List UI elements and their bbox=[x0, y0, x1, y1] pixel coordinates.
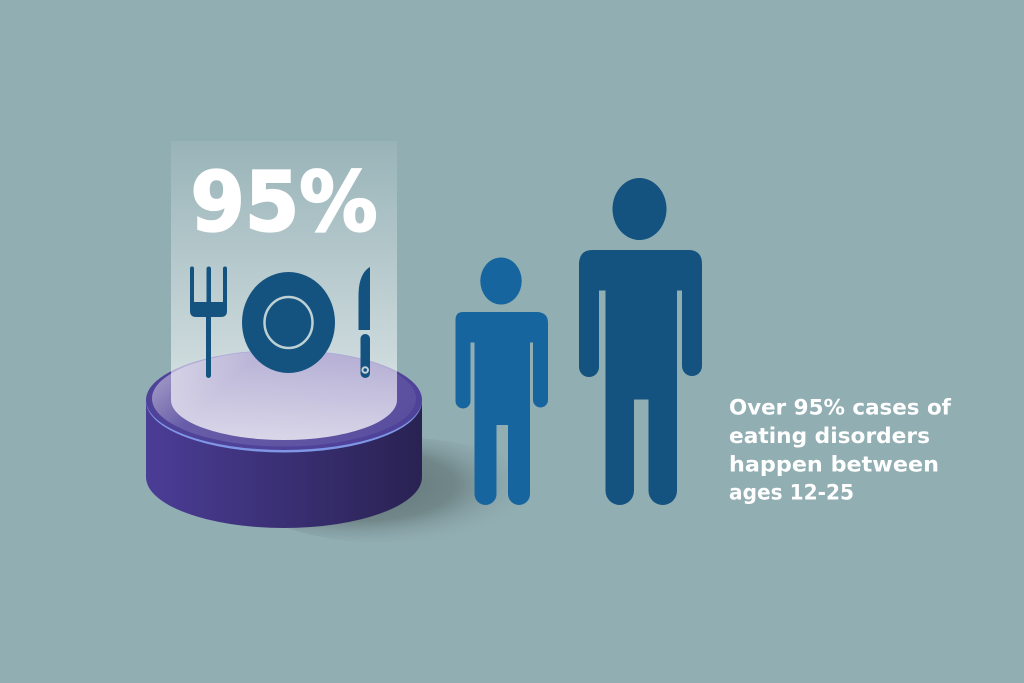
child hip bbox=[474, 342, 530, 425]
plate disc bbox=[242, 272, 335, 373]
adult left leg bbox=[606, 380, 634, 505]
podium cylinder bbox=[146, 350, 422, 528]
adult right arm bbox=[682, 260, 702, 376]
plate ring bbox=[264, 297, 312, 348]
adult right leg bbox=[648, 380, 677, 505]
adult hip bbox=[606, 290, 677, 400]
icon: knife bbox=[358, 267, 370, 378]
child left leg bbox=[474, 400, 496, 505]
adult figure bbox=[579, 178, 702, 505]
podium top lip bbox=[152, 350, 416, 446]
child shoulders bbox=[456, 312, 548, 342]
adult shoulders bbox=[579, 250, 702, 290]
caption line 2: eating disorders bbox=[729, 424, 930, 449]
child right leg bbox=[508, 400, 530, 505]
cast shadow of podium bbox=[242, 437, 538, 543]
icon: fork bbox=[190, 266, 227, 378]
caption line 3: happen between bbox=[729, 452, 939, 478]
glass panel bbox=[171, 141, 397, 440]
adult left arm bbox=[579, 260, 599, 377]
child figure bbox=[456, 258, 548, 505]
adult head bbox=[612, 178, 666, 240]
podium dark top edge bbox=[146, 350, 422, 450]
icon: plate bbox=[242, 272, 335, 373]
podium side bbox=[146, 401, 422, 528]
caption line 1: Over 95% cases of bbox=[729, 396, 952, 420]
knife handle bbox=[360, 334, 370, 378]
knife blade bbox=[358, 267, 370, 330]
child head bbox=[480, 258, 522, 304]
child right arm bbox=[533, 320, 548, 408]
caption line 4: ages 12-25 bbox=[729, 480, 854, 506]
caption text bbox=[729, 396, 952, 506]
big percentage: 95% bbox=[190, 156, 378, 250]
podium blue rim bbox=[146, 350, 422, 452]
knife rivet bbox=[362, 367, 368, 373]
child left arm bbox=[456, 320, 470, 408]
